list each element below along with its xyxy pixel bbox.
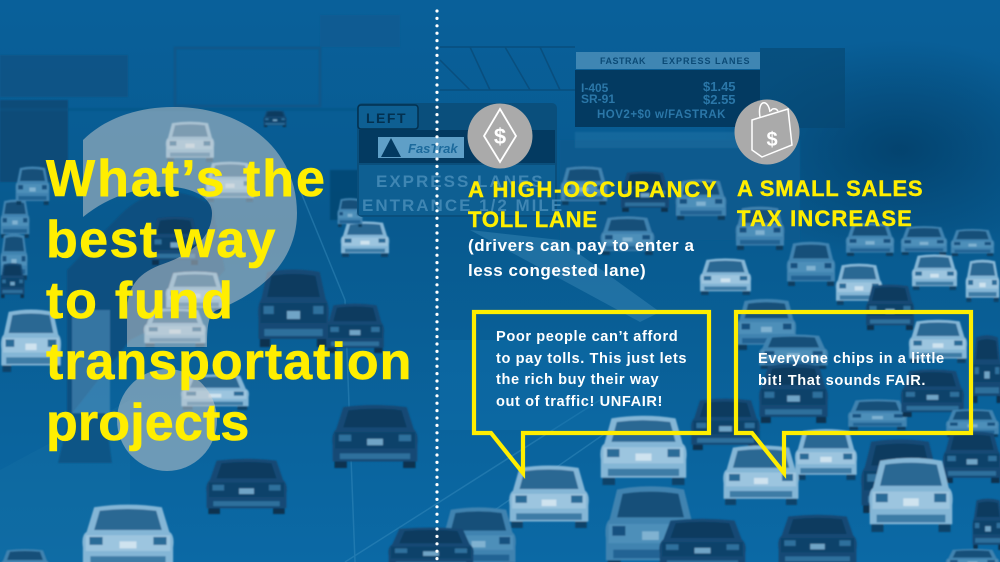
highway signs bbox=[357, 47, 845, 217]
heading: high-occupancy toll lane bbox=[468, 177, 718, 232]
title: projects bbox=[46, 394, 250, 452]
text: toll lane opinion: out of traffic! UNFAIR! bbox=[496, 394, 663, 410]
text: toll lane explanation bbox=[468, 236, 694, 280]
foreground cars bbox=[1, 334, 1000, 562]
overhead toll price sign: EXPRESS LANES bbox=[662, 56, 751, 66]
title: best way bbox=[46, 211, 277, 269]
title bbox=[46, 150, 412, 452]
express lanes sign: FasTrak bbox=[408, 141, 458, 156]
text: toll lane explanation: (drivers can pay to enter a bbox=[468, 236, 694, 255]
overhead toll price sign: $2.55 bbox=[703, 92, 736, 107]
text: toll lane opinion: to pay tolls. This just lets bbox=[496, 351, 687, 367]
heading: small sales tax increase bbox=[737, 176, 923, 231]
icon: toll diamond with dollar sign: $ bbox=[494, 124, 506, 149]
heading: high-occupancy toll lane: A HIGH-OCCUPANCY bbox=[468, 177, 718, 202]
text: sales tax opinion bbox=[758, 351, 945, 389]
heading: small sales tax increase: A SMALL SALES bbox=[737, 176, 923, 201]
LEFT sign: LEFT bbox=[366, 110, 407, 126]
LEFT sign bbox=[358, 105, 418, 129]
text: sales tax opinion: bit! That sounds FAIR. bbox=[758, 373, 926, 389]
text: toll lane opinion bbox=[496, 329, 687, 410]
overhead toll price sign: FASTRAK bbox=[600, 56, 646, 66]
overhead toll price sign: HOV2+$0 w/FASTRAK bbox=[597, 109, 726, 121]
overhead toll price sign: $1.45 bbox=[703, 79, 736, 94]
heading: high-occupancy toll lane: TOLL LANE bbox=[468, 207, 598, 232]
express lanes sign bbox=[357, 103, 564, 217]
heading: small sales tax increase: TAX INCREASE bbox=[737, 206, 913, 231]
express lanes sign: EXPRESS LANES bbox=[376, 172, 545, 191]
text: toll lane explanation: less congested lane) bbox=[468, 261, 646, 280]
title: to fund bbox=[46, 272, 235, 330]
distant traffic band, right bbox=[560, 132, 999, 363]
overhead toll price sign bbox=[440, 47, 845, 128]
express lanes sign: ENTRANCE 1/2 MILE bbox=[362, 196, 564, 215]
dark tree haze, upper right bbox=[720, 40, 1000, 260]
text: toll lane opinion: Poor people can’t afford bbox=[496, 329, 678, 345]
road surface with lane markings bbox=[0, 190, 660, 562]
left lane traffic bbox=[0, 111, 389, 463]
distant overhead gantries, left bbox=[0, 15, 440, 220]
icon: shopping bag with dollar sign: $ bbox=[766, 129, 778, 151]
overhead toll price sign: I-405 bbox=[581, 81, 609, 95]
overhead toll price sign: SR-91 bbox=[581, 92, 615, 106]
title: transportation bbox=[46, 333, 412, 391]
text: toll lane opinion: the rich buy their way bbox=[496, 372, 659, 388]
title: What’s the bbox=[46, 150, 327, 208]
text: sales tax opinion: Everyone chips in a little bbox=[758, 351, 945, 367]
